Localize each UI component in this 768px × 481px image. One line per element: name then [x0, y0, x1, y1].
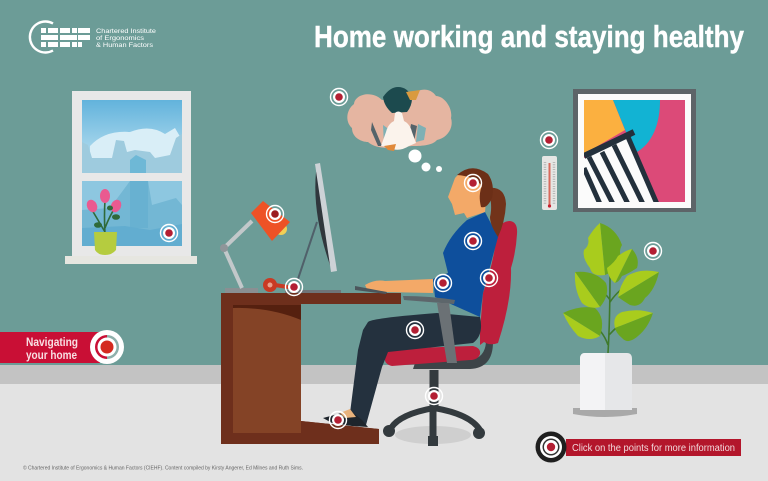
- neck and head: [448, 170, 487, 218]
- navigating target icon: [90, 330, 124, 364]
- hotspot: desk: [286, 278, 302, 296]
- window glass: [82, 100, 182, 246]
- keyboard: [355, 286, 387, 294]
- armrest: [403, 296, 457, 363]
- chair seat: [385, 346, 480, 366]
- meditating figure: [381, 112, 416, 150]
- monitor: [285, 163, 341, 293]
- logo: CIEHF: of Ergonomics: [96, 35, 145, 42]
- plant: [563, 223, 659, 417]
- hotspot: chair: [426, 388, 442, 404]
- click instruction: [536, 432, 741, 462]
- flowers: [85, 189, 123, 235]
- hotspot: window: [160, 224, 178, 242]
- hotspot: back: [480, 270, 498, 286]
- chair base: [391, 370, 480, 441]
- picture frame: [573, 89, 696, 212]
- torso: [433, 212, 498, 317]
- hotspot: head: [464, 174, 482, 192]
- hotspot: temperature: [540, 132, 558, 148]
- plant pot: [580, 353, 632, 410]
- leaves: [563, 223, 659, 341]
- chair back: [480, 221, 517, 345]
- saucer: [573, 408, 637, 417]
- desk lamp: [220, 201, 290, 293]
- arm: [365, 279, 433, 293]
- logo: CIEHF: [30, 22, 156, 53]
- hotspot: elbow: [434, 274, 452, 292]
- red desk object: [263, 278, 294, 292]
- foot: [323, 410, 368, 427]
- desk: [221, 293, 401, 444]
- woman: [323, 168, 506, 427]
- footer credit: © Chartered Institute of Ergonomics & Human Factors (CIEHF). Content compiled by Kirsty Angerer, Ed Milnes and Ruth Sims.: [23, 464, 303, 472]
- logo: CIEHF: & Human Factors: [96, 42, 154, 49]
- flower pot: [94, 232, 117, 255]
- thought bubble: [347, 87, 452, 172]
- click instruction: Click on the points for more information: [572, 443, 735, 454]
- hotspot: lamp: [266, 206, 284, 222]
- hotspot: plant: [644, 242, 662, 260]
- hotspot: mind: [330, 88, 348, 106]
- legs: [350, 313, 481, 425]
- window with plant: [65, 91, 197, 264]
- hotspot: shoulder: [464, 232, 482, 250]
- black target icon: [536, 432, 566, 462]
- chair: [383, 221, 517, 446]
- ponytail: [488, 188, 506, 237]
- navigating your home tab: Navigating: [26, 335, 78, 349]
- logo: CIEHF: Chartered Institute: [96, 28, 156, 35]
- thermometer: [542, 156, 557, 210]
- hair: [457, 168, 493, 207]
- navigating your home tab: your home: [26, 348, 77, 362]
- navigating your home tab: [0, 330, 124, 364]
- hotspot: thigh: [406, 322, 424, 338]
- hotspot: foot: [330, 412, 346, 428]
